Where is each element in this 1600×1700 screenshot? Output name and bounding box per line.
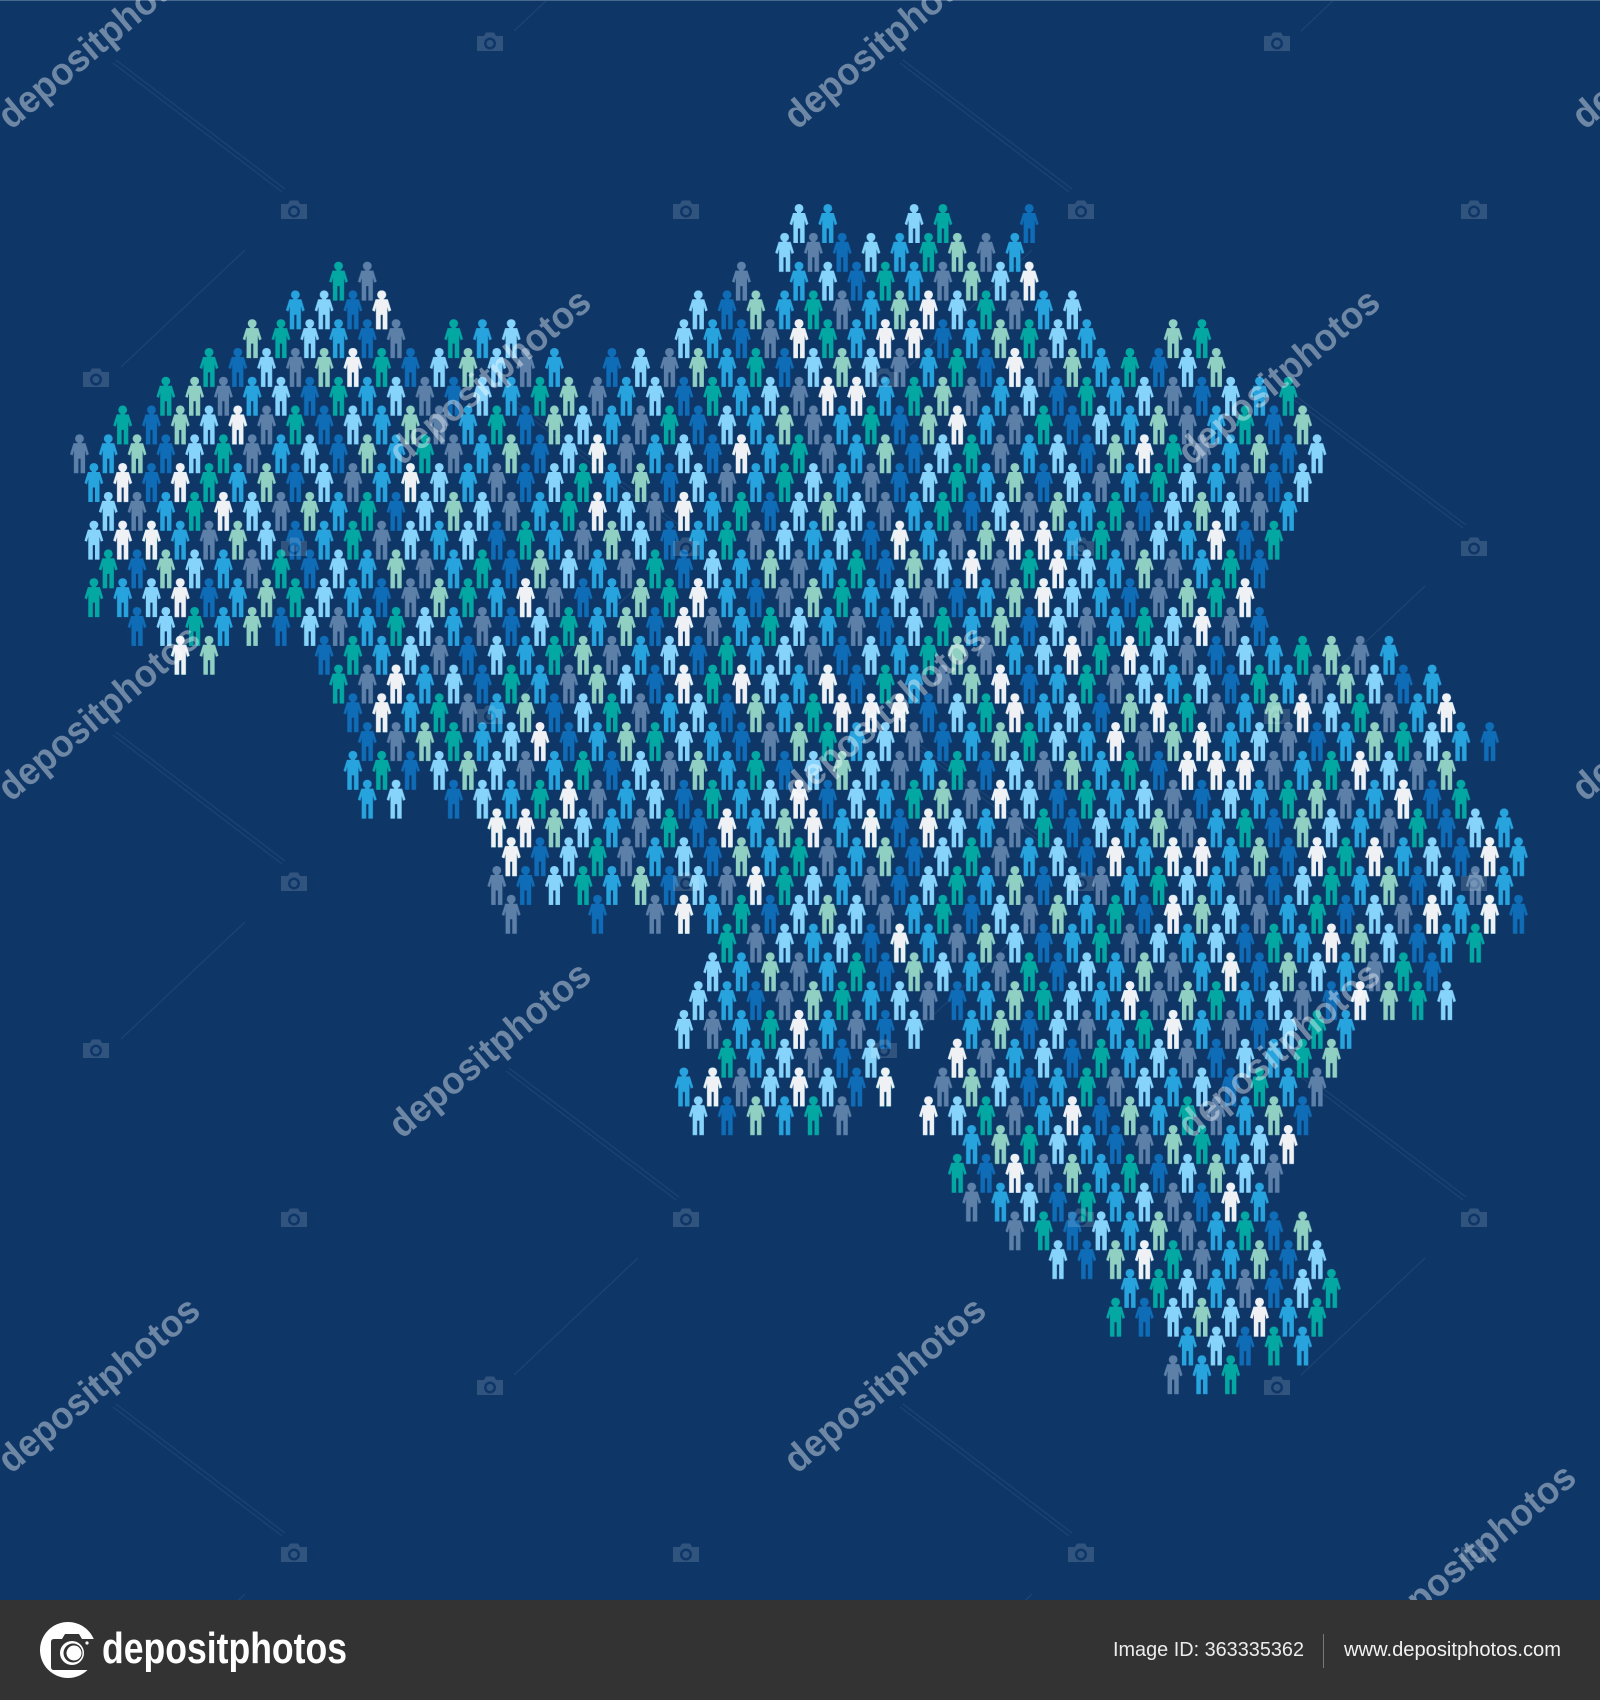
diagonal depositphotos watermarks: depositphotos <box>381 281 599 473</box>
icon: depositphotos camera logo <box>40 1622 96 1678</box>
diagonal depositphotos watermarks: depositphotos <box>776 1289 994 1481</box>
camera watermark icons <box>83 32 1487 1562</box>
population map of Belgium made of person icons <box>65 204 1533 1395</box>
diagonal depositphotos watermarks: depositphotos <box>381 954 599 1146</box>
diagonal depositphotos watermarks: depositphotos <box>1170 954 1388 1146</box>
website url: www.depositphotos.com <box>1343 1639 1561 1661</box>
diagonal depositphotos watermarks: depositphotos <box>1170 281 1388 473</box>
logo wordmark: depositphotos <box>102 1624 347 1673</box>
white person highlights <box>108 262 1504 1338</box>
footer bar <box>0 1600 1600 1700</box>
image id: Image ID: 363335362 <box>1113 1639 1304 1661</box>
diagonal depositphotos watermarks: depositphotos <box>776 617 994 809</box>
diagonal depositphotos watermarks: depositphotos <box>1366 1456 1584 1648</box>
